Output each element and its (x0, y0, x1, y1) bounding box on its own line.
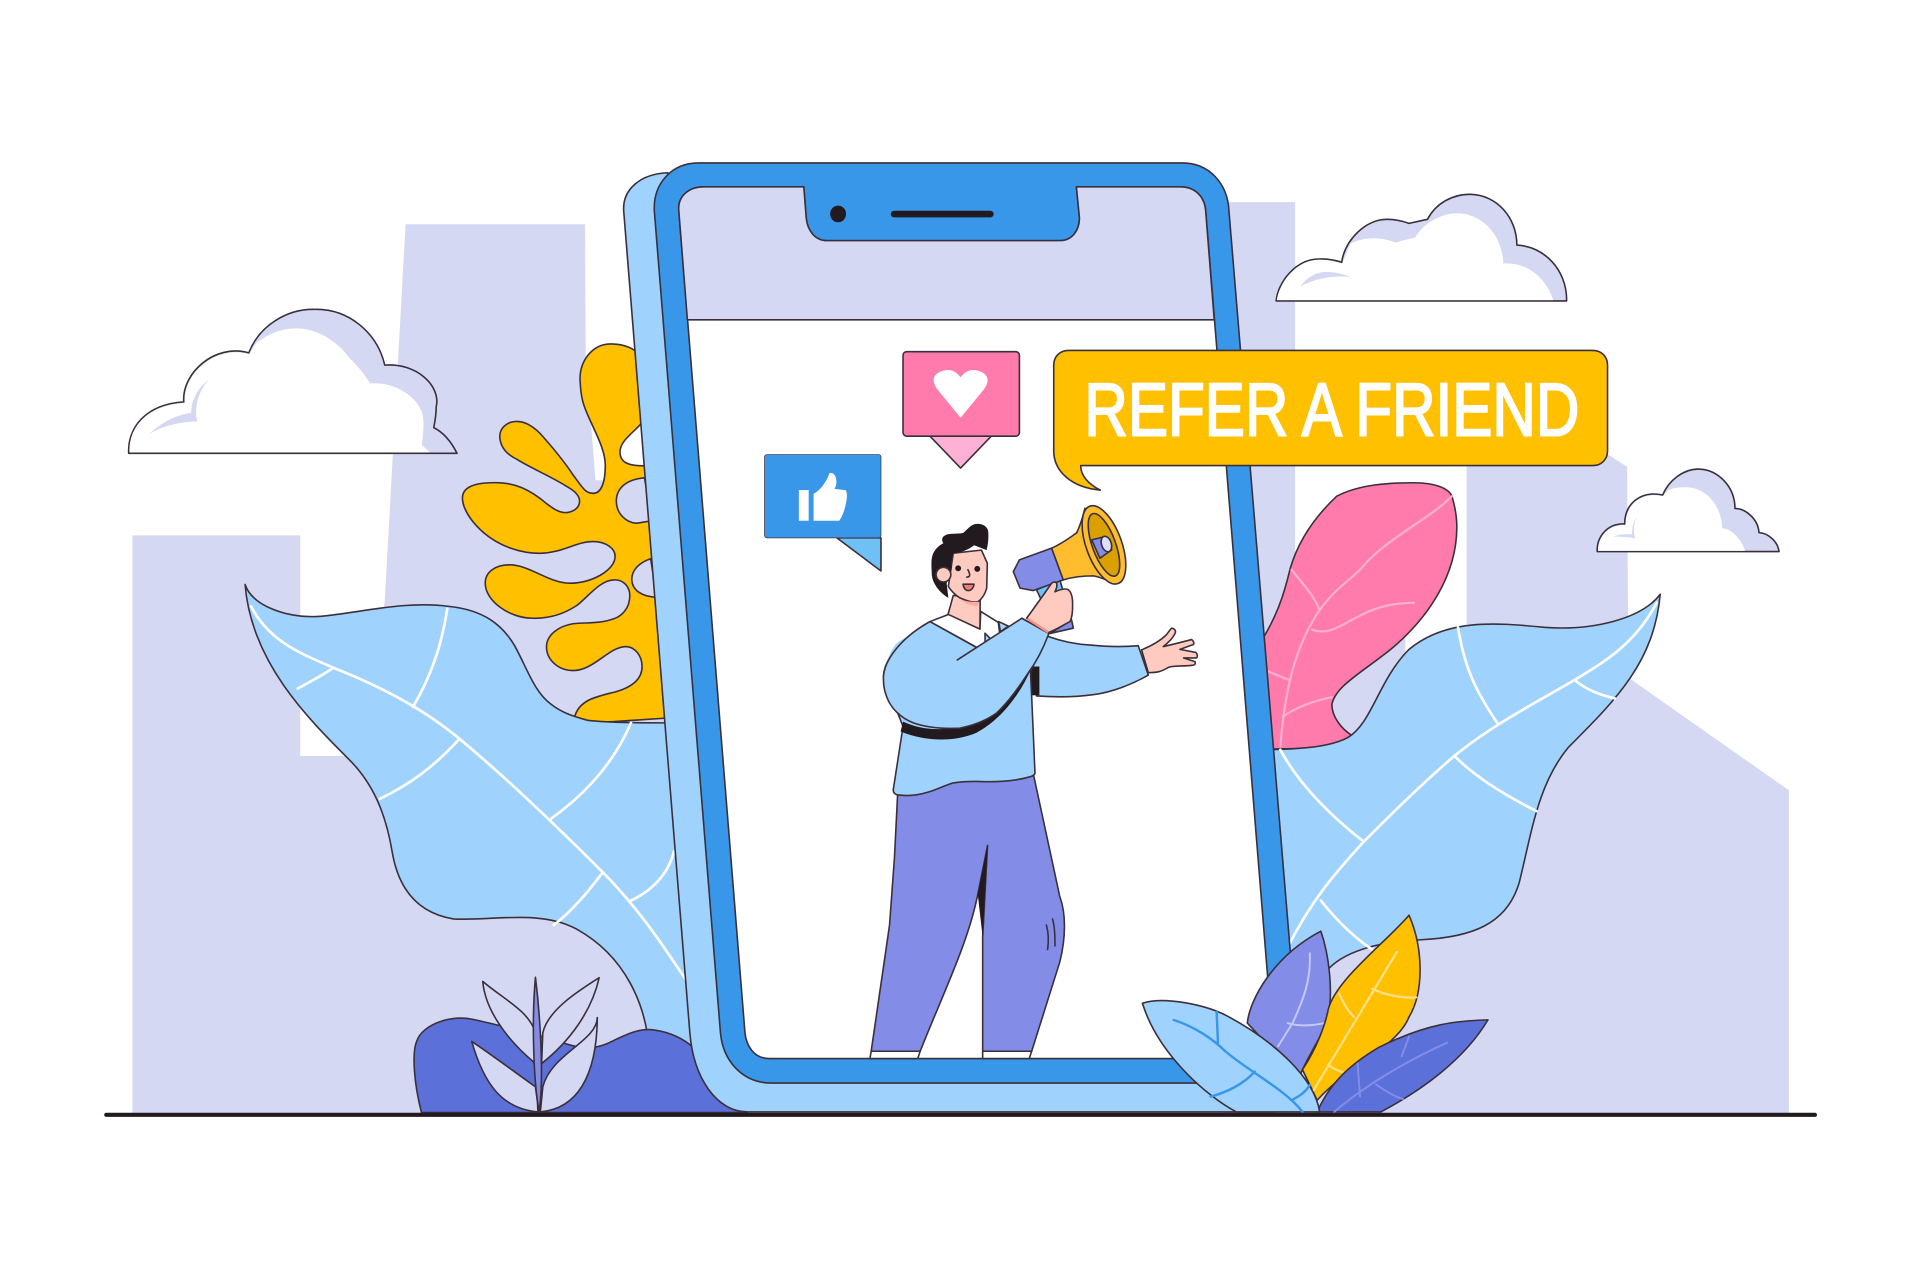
character: neck (947, 595, 980, 629)
character: strap back piece (1028, 667, 1039, 695)
background city: left buildings (132, 224, 698, 1115)
plant: large left leaf (245, 584, 723, 1054)
icon: thumbs up notification (765, 455, 881, 571)
character: knee lines (1046, 919, 1055, 950)
character: socks (870, 1051, 1032, 1059)
phone: lavender status area (679, 187, 1214, 320)
megaphone: rear (1013, 548, 1063, 591)
character: sleeve outline (883, 618, 1049, 728)
cloud: small right (1597, 469, 1779, 552)
speech bubble: refer a friend (1054, 350, 1608, 490)
character: hair (931, 524, 988, 598)
shrub: dark blue bush (414, 1018, 747, 1113)
character: trouser shadow (978, 845, 988, 937)
character: mouth (963, 584, 974, 591)
character: sweater body (883, 618, 1049, 796)
plant: purple leaf (1247, 931, 1330, 1078)
character: ear (936, 567, 951, 582)
speech bubble: refer a friend: REFER A FRIEND (1084, 368, 1579, 452)
background city: right buildings (1225, 202, 1789, 1115)
megaphone: cone (1052, 508, 1110, 581)
megaphone: blue handle (1037, 580, 1064, 600)
plant: yellow leaf (1302, 915, 1420, 1100)
megaphone: driver (1092, 537, 1112, 558)
phone: front frame (654, 163, 1293, 1083)
character: hand on megaphone (1027, 582, 1073, 633)
character: collar (930, 611, 1000, 648)
phone (624, 163, 1293, 1112)
character: blush (960, 599, 978, 606)
character: face (948, 550, 987, 602)
megaphone: lower grip (1050, 620, 1073, 633)
character: strap (901, 668, 1032, 739)
cloud: top right (1276, 194, 1567, 301)
plant: dark blue leaf (1317, 1020, 1488, 1112)
phone: screen (679, 187, 1274, 1059)
phone: speaker (891, 211, 994, 217)
character: nose (967, 570, 970, 577)
icon: heart notification (903, 352, 1019, 468)
megaphone: bell (1073, 500, 1135, 590)
character: eyes (955, 565, 961, 571)
character: undershirt (985, 622, 1008, 644)
character: near sleeve (883, 618, 1049, 728)
character: man with megaphone (870, 500, 1197, 1059)
plant: yellow splat leaf (462, 344, 668, 722)
character: right hand (1142, 628, 1197, 673)
character: far arm (1027, 637, 1148, 697)
character: trousers (871, 772, 1064, 1051)
phone: back body (624, 173, 1274, 1112)
phone: camera (830, 206, 846, 222)
plant: large right leaf (1250, 594, 1660, 968)
plant: pink leaf (1256, 483, 1457, 749)
ground line (104, 1113, 1817, 1117)
cloud: left (129, 309, 457, 453)
character: megaphone (1013, 500, 1135, 633)
character: cuff (1027, 619, 1048, 632)
plant: light blue leaf (1142, 1001, 1320, 1112)
plant: small lavender sprout (472, 977, 599, 1112)
